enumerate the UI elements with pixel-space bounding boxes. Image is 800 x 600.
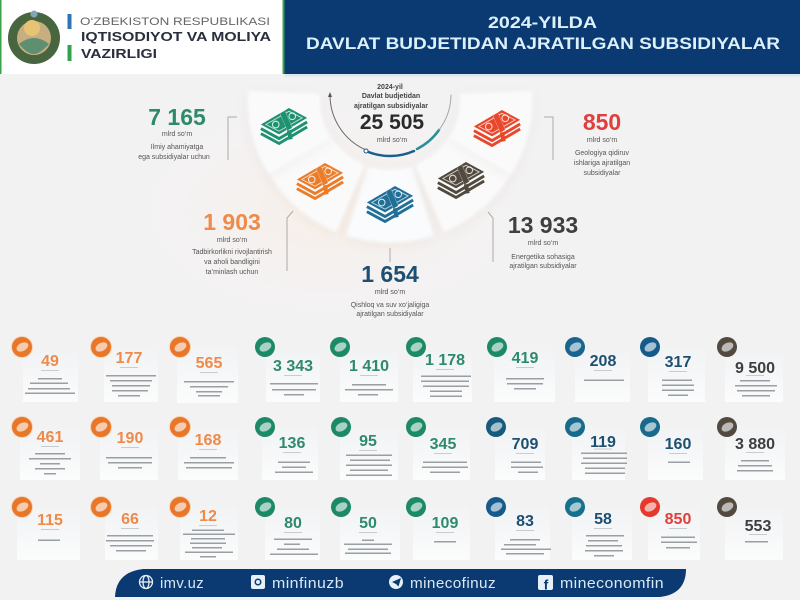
title banner: DAVLAT BUDJETIDAN AJRATILGAN SUBSIDIYALAR	[306, 34, 780, 53]
central total: 2024-yil	[377, 84, 403, 91]
card: 1 410	[330, 337, 398, 402]
card: 49	[12, 336, 78, 402]
card: 168: 168	[195, 432, 221, 449]
callout: 13 933: mlrd so‘m	[528, 240, 558, 247]
card: 461	[12, 416, 80, 480]
card: 461: 461	[37, 429, 63, 446]
card: 119	[565, 417, 627, 480]
card: 9 500	[717, 337, 783, 402]
card: 80: 80	[284, 515, 302, 532]
petal: orange	[273, 139, 362, 229]
card: 190: 190	[117, 430, 143, 447]
header: ministry logo block	[0, 0, 284, 74]
row 1 cards	[12, 336, 783, 403]
website: imv.uz	[160, 575, 204, 592]
icon: facebook	[538, 575, 553, 592]
card: 12	[170, 496, 238, 560]
card: 709: 709	[512, 436, 538, 453]
callout: 1 903: Tadbirkorlikni rivojlantirish	[192, 249, 272, 256]
card: 177	[90, 336, 158, 402]
callout: 13 933: Energetika sohasiga	[511, 254, 575, 261]
card: 1 178: 1 178	[425, 352, 465, 369]
instagram handle: minfinuzb	[272, 575, 344, 592]
callout: 1 654: mlrd so‘m	[375, 289, 405, 296]
callout: 1 903: 1 903	[203, 209, 261, 235]
card: 3 880: 3 880	[735, 436, 775, 453]
facebook handle: mineconomfin	[560, 575, 664, 592]
callout: 1 654: 1 654	[361, 261, 419, 287]
card: 345: 345	[430, 436, 456, 453]
callout: 7 165: mlrd so‘m	[162, 131, 192, 138]
card: 160: 160	[665, 436, 691, 453]
callout: 1 654: ajratilgan subsidiyalar	[356, 311, 424, 318]
card: 3 343	[255, 337, 320, 402]
card: 80	[255, 497, 320, 560]
card: 50	[331, 497, 400, 560]
card: 109: 109	[432, 515, 458, 532]
callout: 7 165: ega subsidiyalar uchun	[138, 154, 210, 161]
title banner: 2024-YILDA	[488, 13, 597, 32]
callout: 13 933: 13 933	[508, 212, 578, 238]
card: 419: 419	[512, 350, 538, 367]
callout: 1 903: mlrd so‘m	[217, 237, 247, 244]
card: 95: 95	[359, 433, 377, 450]
card: 345	[406, 417, 470, 480]
card: 58	[565, 497, 632, 560]
central total: 25 505	[360, 111, 424, 134]
card: 553	[717, 497, 783, 560]
card: 565: 565	[196, 355, 222, 372]
ministry name: VAZIRLIGI	[81, 46, 157, 61]
card: 3 343: 3 343	[273, 358, 313, 375]
card: 208: 208	[590, 353, 616, 370]
card: 109	[406, 497, 470, 560]
card: 850: 850	[665, 511, 691, 528]
callout: 1 903: ta’minlash uchun	[206, 269, 258, 276]
fan of petals with money icons	[250, 93, 530, 240]
card: 115	[12, 496, 80, 560]
card: 1 178	[406, 337, 472, 402]
ministry name	[80, 16, 272, 61]
card: 160	[640, 417, 703, 480]
card: 709	[486, 417, 545, 480]
card: 136: 136	[279, 435, 305, 452]
callout: 7 165: Ilmiy ahamiyatga	[151, 144, 203, 151]
card: 95	[331, 417, 398, 480]
callout: 850: mlrd so‘m	[587, 137, 617, 144]
callout: 7 165	[138, 104, 237, 161]
petal: blue	[349, 169, 431, 240]
card: 58: 58	[594, 511, 612, 528]
card: 119: 119	[590, 434, 616, 451]
card: 136	[255, 417, 318, 480]
central total: mlrd so‘m	[377, 137, 407, 144]
callout: 850: Geologiya qidiruv	[575, 150, 630, 157]
central total: Davlat budjetidan	[362, 93, 420, 100]
icon: facebook: f	[544, 576, 549, 592]
callout: 1 903: va aholi bandligini	[204, 259, 260, 266]
card: 66	[90, 496, 158, 560]
callout: 13 933: ajratilgan subsidiyalar	[509, 263, 577, 270]
callout: 13 933	[488, 212, 578, 270]
card: 565	[170, 336, 238, 403]
card: 115: 115	[37, 512, 63, 529]
callout: 850: subsidiyalar	[584, 170, 621, 177]
callout: 7 165: 7 165	[148, 104, 206, 130]
card: 49: 49	[41, 353, 59, 370]
card: 177: 177	[116, 350, 142, 367]
card: 3 880	[717, 417, 785, 480]
telegram handle: minecofinuz	[410, 575, 496, 592]
icon: state emblem	[8, 10, 60, 64]
callout: 850: 850	[583, 109, 621, 135]
title banner	[284, 0, 800, 76]
icon: web	[140, 576, 152, 588]
callout: 1 903	[192, 209, 293, 276]
ministry name: O‘ZBEKISTON RESPUBLIKASI	[80, 16, 270, 28]
callout: 1 654: Qishloq va suv xo‘jaligiga	[351, 302, 429, 309]
row 3 cards	[12, 496, 783, 560]
icon: instagram	[251, 575, 265, 589]
card: 12: 12	[199, 508, 217, 525]
card: 168	[170, 416, 238, 480]
petal: green	[250, 93, 328, 172]
icon: telegram	[389, 575, 403, 589]
card: 50: 50	[359, 515, 377, 532]
card: 1 410: 1 410	[349, 358, 389, 375]
card: 190	[90, 416, 158, 480]
callout: 1 654	[351, 248, 429, 318]
arc	[328, 92, 451, 156]
row 2 cards	[12, 416, 785, 480]
card: 419	[487, 337, 555, 402]
card: 317: 317	[665, 354, 691, 371]
central total: ajratilgan subsidiyalar	[354, 103, 428, 110]
ministry name: IQTISODIYOT VA MOLIYA	[81, 29, 272, 44]
card: 553: 553	[745, 518, 771, 535]
callout: 850: ishlariga ajratilgan	[574, 160, 630, 167]
central total	[328, 84, 451, 156]
footer social bar	[115, 569, 686, 597]
petal: red	[452, 93, 530, 172]
card: 66: 66	[121, 511, 139, 528]
card: 208	[565, 337, 630, 402]
card: 83: 83	[516, 513, 534, 530]
card: 9 500: 9 500	[735, 360, 775, 377]
card: 83	[486, 497, 551, 560]
card: 850	[640, 497, 700, 560]
petal: brown	[418, 139, 507, 229]
callout: 850	[544, 109, 630, 177]
card: 317	[640, 337, 705, 402]
